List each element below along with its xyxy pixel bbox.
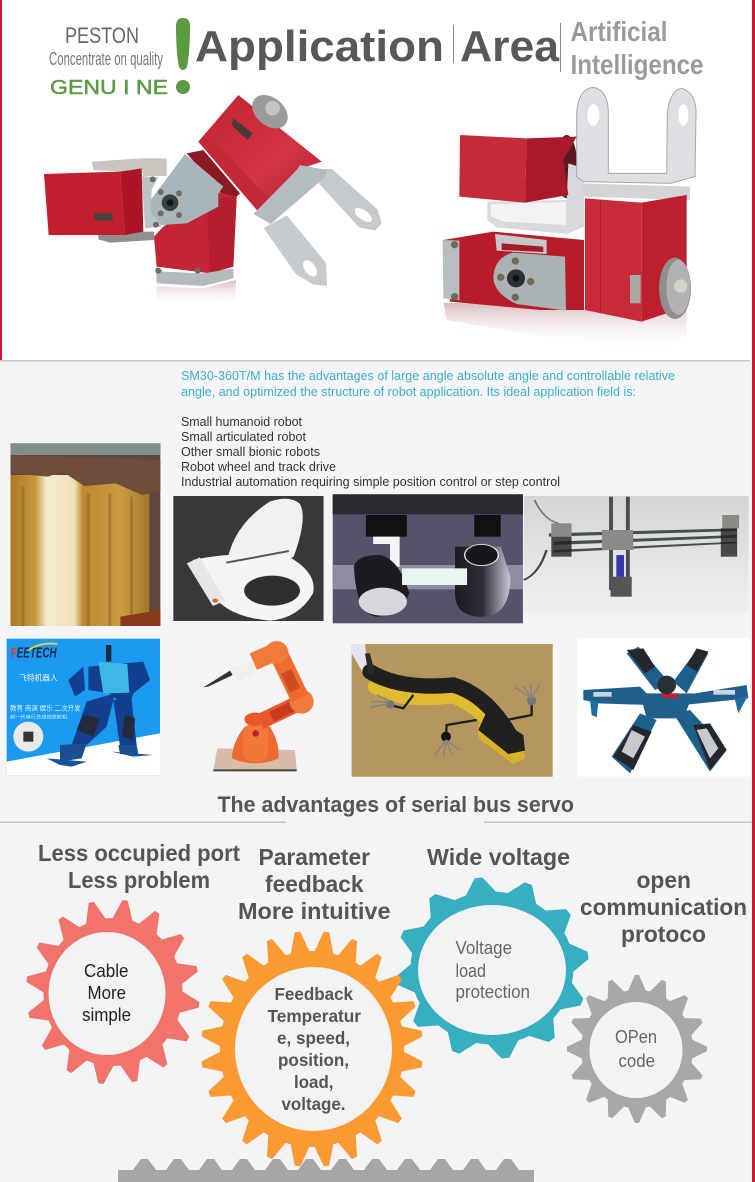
feature heading: parameter feedback: More intuitive bbox=[238, 898, 390, 924]
gear text: voltage load protection bbox=[456, 938, 530, 1002]
gear text: voltage load protection: Voltage bbox=[456, 938, 512, 958]
subtitle: artificial intelligence bbox=[570, 16, 704, 80]
application list bbox=[181, 414, 560, 489]
gear text: feedback values: load, bbox=[294, 1072, 334, 1092]
photo: humanoid robot ad bbox=[7, 639, 160, 776]
section heading: advantages: The advantages of serial bus servo bbox=[218, 792, 574, 817]
brand block bbox=[49, 18, 190, 99]
photo: track lights bbox=[333, 494, 523, 623]
gear text: voltage load protection: protection bbox=[456, 982, 530, 1002]
gear text: feedback values: e, speed, bbox=[277, 1028, 350, 1048]
gear: red cable bbox=[25, 899, 201, 1085]
ad tagline: 教育 商演 娱乐 二次开发 bbox=[10, 703, 81, 712]
subtitle: artificial intelligence: Artificial bbox=[570, 16, 668, 47]
gear: gray open code bbox=[567, 975, 707, 1123]
ad small print: 新一代单行总线视觉舵机 bbox=[10, 714, 68, 721]
brand tagline: Concentrate on quality bbox=[49, 49, 163, 69]
feature heading: open communication protocol bbox=[580, 867, 747, 947]
photo: orange robot arm bbox=[203, 641, 314, 771]
gear text: cable more simple: simple bbox=[82, 1005, 131, 1025]
intro paragraph: angle, and optimized the structure of robot application. Its ideal application field is: bbox=[181, 384, 636, 399]
gear text: feedback values: position, bbox=[278, 1050, 349, 1070]
gear text: open code: OPen bbox=[615, 1027, 657, 1047]
ad slogan: 飞特机器人 bbox=[19, 673, 58, 683]
feature heading: wide voltage: Wide voltage bbox=[427, 844, 570, 870]
photo: pen plotter bbox=[524, 496, 749, 613]
intro paragraph: SM30-360T/M has the advantages of large angle absolute angle and controllable relative bbox=[181, 368, 675, 383]
icon: exclamation mark bbox=[176, 18, 190, 94]
robot logo: FEETECH bbox=[11, 645, 57, 661]
feature heading: open communication protocol: communication bbox=[580, 894, 747, 920]
feature heading: less occupied port: Less occupied port bbox=[38, 840, 240, 866]
gear text: feedback values: voltage. bbox=[282, 1094, 346, 1114]
photo: smart toilet seat bbox=[173, 496, 324, 621]
photo: curtain bbox=[11, 443, 160, 626]
gear text: open code: code bbox=[618, 1051, 655, 1071]
genuine label: GENU I NE bbox=[50, 77, 168, 99]
application list: Industrial automation requiring simple position control or step control bbox=[181, 474, 560, 489]
title bbox=[195, 16, 704, 80]
gear: teal voltage bbox=[394, 876, 590, 1060]
photo: servo assembly right bbox=[443, 87, 696, 350]
gear text: cable more simple: Cable bbox=[84, 961, 128, 981]
application list: Other small bionic robots bbox=[181, 444, 320, 459]
feature heading: open communication protocol: open bbox=[636, 867, 691, 893]
photo: servo arm left bbox=[44, 88, 381, 307]
feature heading: less occupied port: Less problem bbox=[68, 867, 210, 893]
feature heading: parameter feedback: feedback bbox=[265, 871, 364, 897]
application list: Robot wheel and track drive bbox=[181, 459, 336, 474]
gear text: open code bbox=[615, 1027, 657, 1071]
feature heading: parameter feedback bbox=[238, 844, 390, 924]
brand name: PESTON bbox=[65, 23, 139, 48]
application list: Small articulated robot bbox=[181, 429, 306, 444]
intro paragraph bbox=[181, 368, 675, 399]
subtitle: artificial intelligence: Intelligence bbox=[570, 49, 704, 80]
gear text: feedback values bbox=[268, 984, 361, 1114]
gear text: feedback values: Feedback bbox=[274, 984, 353, 1004]
photo: salamander robot bbox=[352, 644, 553, 777]
feature heading: open communication protocol: protoco bbox=[621, 921, 706, 947]
title word: area: Area bbox=[460, 22, 560, 71]
application list: Small humanoid robot bbox=[181, 414, 302, 429]
title word: application: Application bbox=[195, 22, 444, 71]
feature heading: parameter feedback: Parameter bbox=[258, 844, 370, 870]
gear text: cable more simple: More bbox=[88, 983, 126, 1003]
gear text: cable more simple bbox=[82, 961, 131, 1025]
photo: hexapod robot bbox=[578, 638, 750, 777]
gear text: feedback values: Temperatur bbox=[268, 1006, 361, 1026]
gear: orange feedback bbox=[201, 931, 423, 1167]
feature heading: less occupied port bbox=[38, 840, 240, 893]
rack bbox=[118, 1159, 534, 1182]
gear text: voltage load protection: load bbox=[456, 961, 486, 981]
